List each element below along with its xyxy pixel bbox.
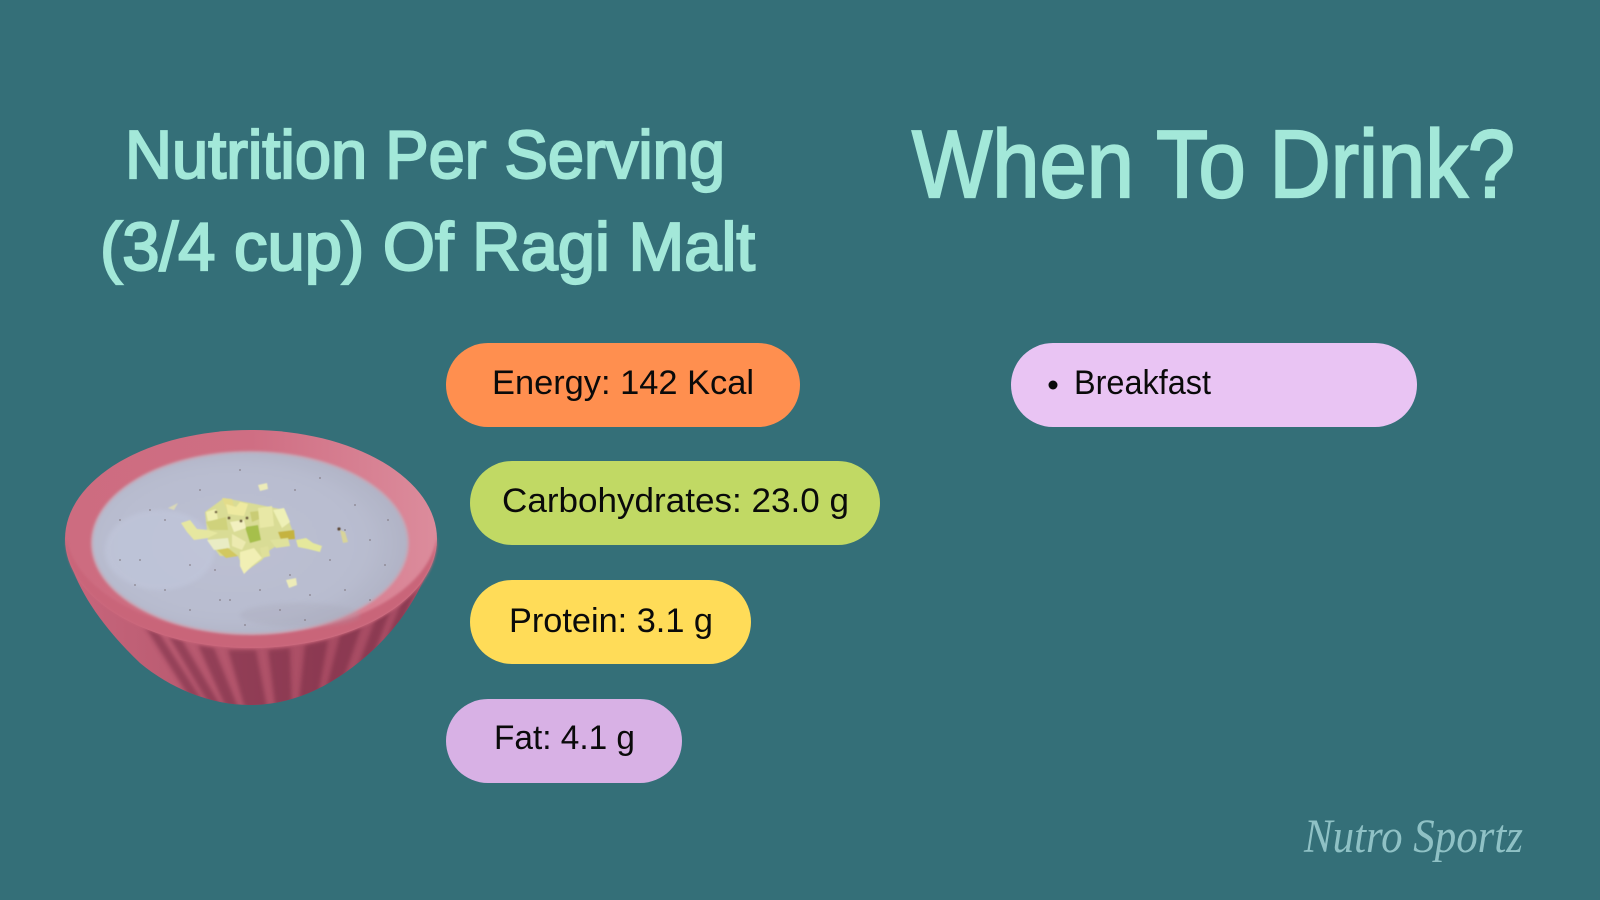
pill: breakfast	[1011, 343, 1417, 427]
title: nutrition per serving: (3/4 cup) Of Ragi Malt	[100, 209, 755, 285]
pill: fat	[446, 699, 682, 783]
pill: protein	[470, 580, 751, 664]
pill: breakfast: Breakfast	[1074, 364, 1212, 402]
pill: energy: Energy: 142 Kcal	[492, 364, 754, 402]
pill: protein: Protein: 3.1 g	[509, 602, 713, 640]
title: when to drink: When To Drink?	[912, 111, 1515, 218]
milk specks	[119, 469, 389, 626]
title: nutrition per serving	[100, 117, 755, 285]
pill: carbohydrates: Carbohydrates: 23.0 g	[502, 482, 849, 520]
title: nutrition per serving: Nutrition Per Serving	[125, 117, 725, 193]
pill: energy	[446, 343, 800, 427]
image: bowl of ragi malt	[65, 430, 437, 712]
pistachio garnish	[168, 483, 348, 588]
pill: fat: Fat: 4.1 g	[494, 719, 635, 757]
logo: nutro sportz: Nutro Sportz	[1303, 810, 1523, 863]
pill: carbohydrates	[470, 461, 880, 545]
